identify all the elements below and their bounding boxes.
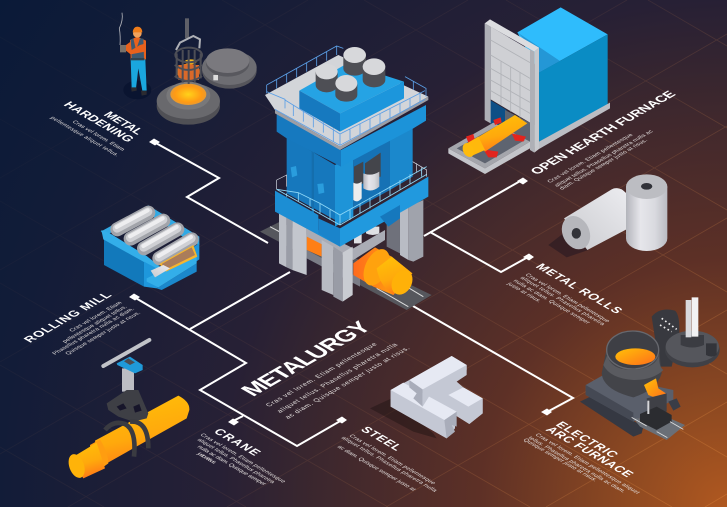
- furnace box: [517, 7, 608, 73]
- hanger column: [122, 368, 134, 392]
- label: metal rolls: justo at risus.: [504, 281, 543, 304]
- connector: metal hardening: [154, 142, 268, 243]
- blue head: [117, 357, 143, 373]
- title description: ac diam. Quisque semper justo at risus.: [284, 346, 412, 420]
- bolts: [291, 166, 324, 194]
- label: steel: aliquet tellus. Phasellus pharetra nulla: [339, 436, 439, 493]
- right frame: [144, 243, 199, 288]
- carriage: [307, 225, 385, 260]
- main ladle: [602, 331, 663, 397]
- label: steel: Cras vel lorem. Etiam pellentesque: [347, 434, 436, 486]
- label: electric arc furnace: Quisque semper justo at risus.: [521, 438, 599, 483]
- label: open hearth furnace: OPEN HEARTH FURNACE: [527, 88, 679, 177]
- top platform: [265, 55, 428, 147]
- label: steel: ac diam. Quisque semper justo at: [335, 445, 417, 492]
- basket: [175, 18, 202, 84]
- title description: aliquet tellus. Phasellus pharetra nulla: [276, 342, 400, 414]
- upper band: [277, 113, 341, 167]
- top bar: [103, 340, 149, 366]
- pistons lower: [354, 227, 379, 243]
- label: open hearth furnace: diam. Quisque semper justo at risus.: [559, 138, 650, 191]
- electrode arm: [652, 297, 720, 367]
- upper railing: [267, 46, 426, 145]
- connector: rolling mill and crane steel: [134, 272, 342, 446]
- label: metal rolls: nulla ac diam. Quisque semper: [511, 279, 591, 325]
- label: rolling mill: Cras vel lorem. Etiam: [69, 301, 124, 333]
- illustration: steel beams: [370, 356, 483, 438]
- pistons: [354, 153, 381, 187]
- output slab: [159, 245, 197, 272]
- centre front leg: [322, 240, 333, 295]
- shadow: [370, 398, 437, 438]
- label: rolling mill: Quisque semper justo at risus.: [65, 311, 143, 356]
- front beam: [391, 383, 457, 438]
- mid blue band: [275, 191, 340, 247]
- rear legs: [387, 203, 400, 253]
- tray: [448, 123, 530, 168]
- frame back: [101, 205, 199, 245]
- label: open hearth furnace: aliquet tellus. Phasellus pharetra nulla ac: [554, 129, 655, 188]
- connector: metal rolls: [430, 232, 528, 272]
- horizontal roll: [556, 188, 628, 254]
- label: crane: nulla ac diam. Quisque semper: [195, 445, 267, 487]
- label: metal hardening: Cras vel lorem. Etiam: [70, 120, 126, 152]
- pouring metal: [644, 378, 666, 398]
- rear mid railing: [277, 162, 427, 189]
- small ladle and cart: [640, 393, 672, 430]
- illustration: metal rolls: [548, 174, 667, 257]
- base: [580, 396, 643, 437]
- label: crane: justo at risus.: [194, 451, 218, 465]
- clamp jaws: [105, 422, 148, 457]
- label: electric arc furnace: ELECTRIC: [552, 419, 622, 460]
- left front leg: [279, 213, 287, 267]
- illustration: electric arc furnace: [580, 297, 720, 440]
- top beam: [409, 356, 467, 407]
- label: electric arc furnace: tellus. Phasellus pharetra nulla ac diam.: [526, 436, 627, 494]
- label: electric arc furnace: Cras vel lorem. Etiam pellentesque aliquet: [533, 433, 641, 495]
- illustration: open hearth furnace: [448, 7, 610, 174]
- illustration: rolling mill: [101, 205, 199, 290]
- label: rolling mill: Phasellus pharetra nulla ac diam.: [52, 307, 137, 356]
- door frame: [485, 19, 539, 52]
- illustration: crane with billet: [66, 340, 189, 480]
- connector: open hearth furnace: [424, 180, 522, 236]
- mid railing: [277, 167, 427, 225]
- title: METALURGY: [235, 317, 377, 400]
- four cylinders: [316, 47, 385, 102]
- mid body: [287, 137, 335, 220]
- label: metal rolls: Cras vel lorem. Etiam pellentesque: [523, 273, 611, 324]
- label: metal hardening: HARDENING: [60, 99, 137, 144]
- frame side faces: [104, 236, 144, 287]
- back beam: [448, 387, 483, 424]
- door panel: [491, 27, 530, 123]
- rollers: [117, 210, 192, 258]
- label: electric arc furnace: ARC FURNACE: [542, 424, 637, 479]
- label: metal rolls: METAL ROLLS: [532, 261, 626, 316]
- track: [260, 222, 432, 310]
- label: steel: STEEL: [357, 424, 406, 453]
- label: open hearth furnace: Cras vel lorem. Etiam pellentesque: [547, 133, 635, 184]
- label: metal hardening: [48, 99, 147, 158]
- connector lines: [129, 138, 573, 446]
- front billet: [353, 245, 417, 298]
- label: crane: Cras vel lorem. Etiam pellentesque: [198, 433, 287, 484]
- top blue block: [299, 63, 404, 113]
- illustration: metal hardening: [119, 13, 257, 125]
- billet: [473, 115, 527, 152]
- vertical roll: [626, 174, 667, 251]
- label: crane: CRANE: [210, 426, 264, 458]
- clamp frame: [107, 390, 148, 422]
- furnace: [157, 82, 220, 125]
- opening: [490, 100, 507, 127]
- central press machine: [260, 46, 432, 310]
- red supports: [466, 117, 526, 157]
- label: metal hardening: pellentesque aliquet tellus.: [48, 116, 120, 158]
- lid: [202, 48, 257, 89]
- shadow: [548, 233, 588, 257]
- label: rolling mill: ROLLING MILL: [20, 290, 115, 345]
- label: metal rolls: aliquet tellus. Phasellus pharetra: [518, 276, 606, 327]
- connector: electric arc furnace: [413, 306, 573, 412]
- title description: Cras vel lorem. Etiam pellentesque: [265, 342, 379, 408]
- label: crane: aliquet tellus. Phasellus pharetra: [195, 438, 276, 485]
- track: [633, 418, 685, 440]
- billet: [66, 396, 189, 480]
- worker: [119, 13, 151, 99]
- rear orange billet: [307, 237, 322, 257]
- connector end dots: [129, 138, 552, 426]
- label: metal rolls: [504, 261, 626, 327]
- label: rolling mill: pellentesque aliquet tellus.: [62, 305, 129, 344]
- label: metal hardening: METAL: [100, 109, 147, 137]
- label: rolling mill: [20, 290, 143, 356]
- beam silhouette: [391, 356, 483, 438]
